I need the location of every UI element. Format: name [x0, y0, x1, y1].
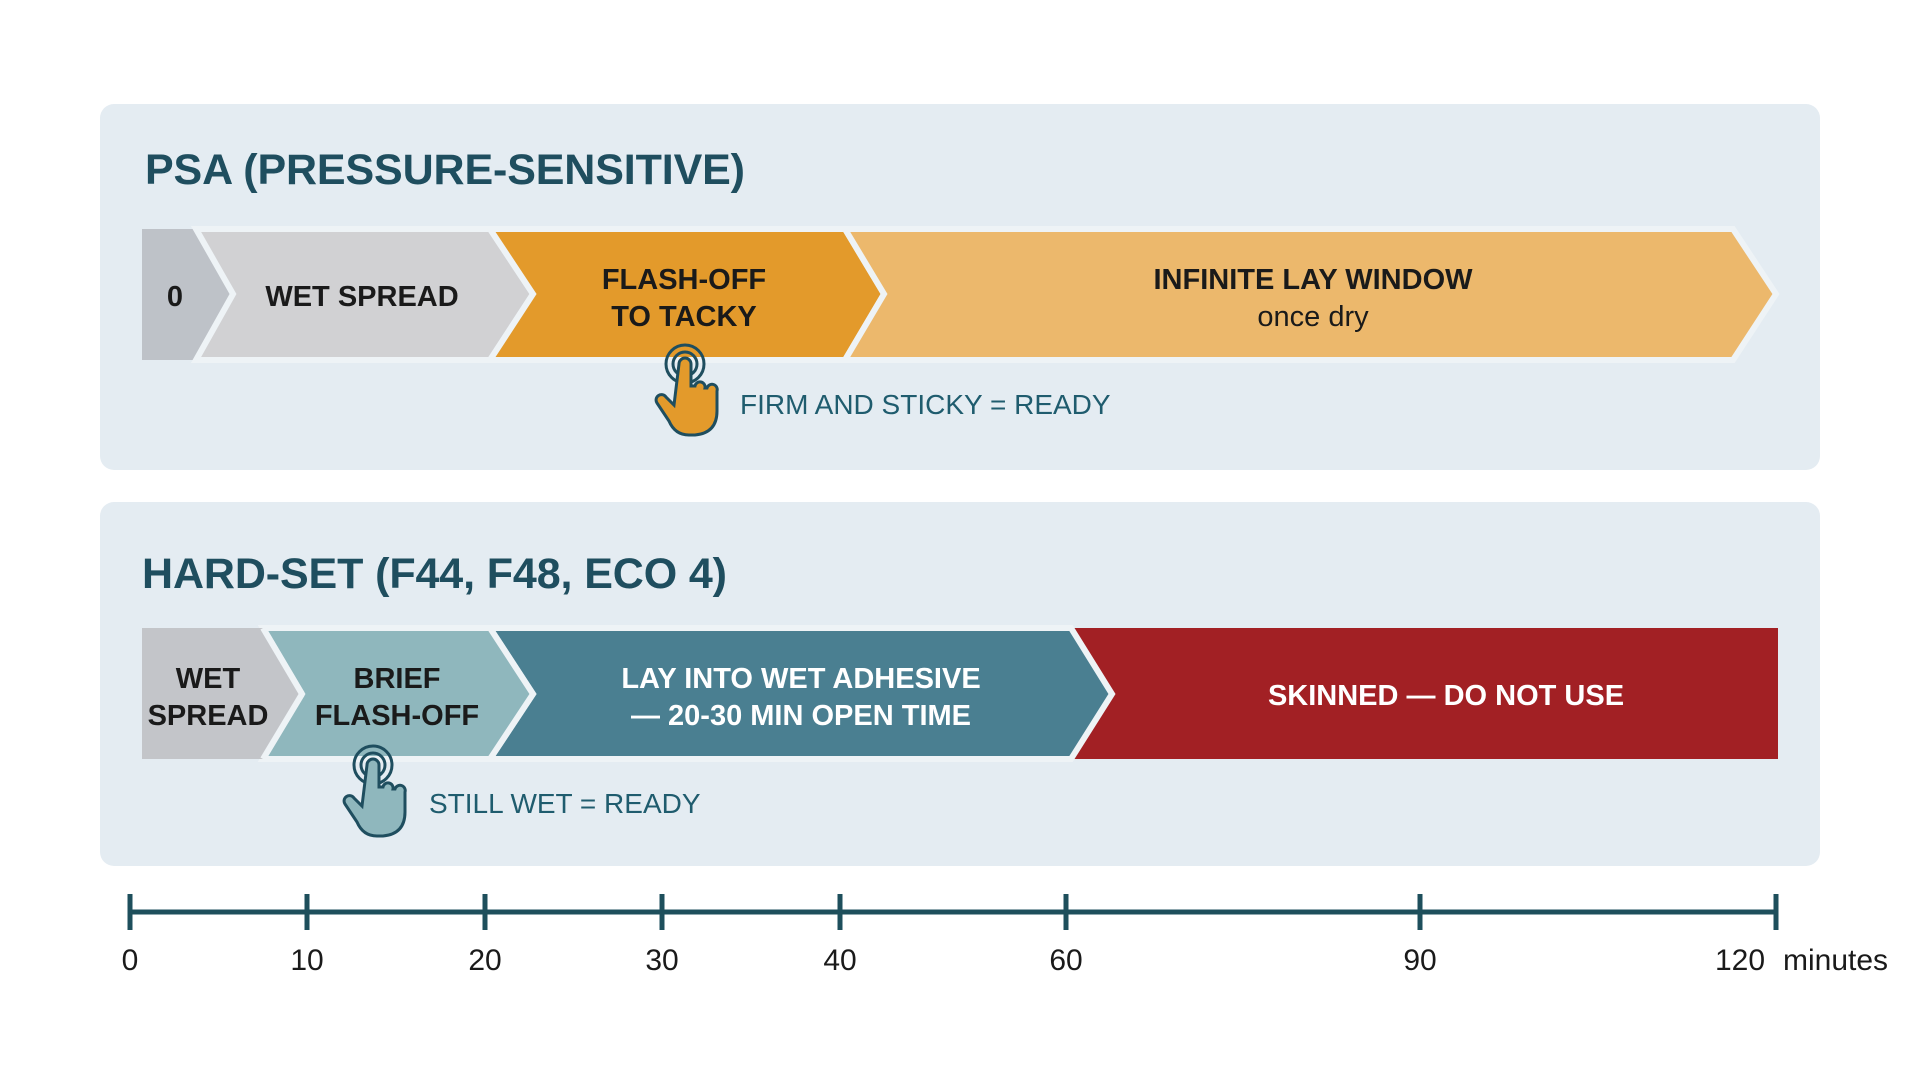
axis: minutes: 10 [290, 944, 324, 977]
axis: minutes: 20 [468, 944, 502, 977]
segment labels: PSA: once dry [1257, 301, 1369, 333]
axis: minutes: 40 [823, 944, 857, 977]
segment labels: HARD-SET: BRIEF [354, 663, 440, 695]
axis: minutes: 90 [1403, 944, 1437, 977]
segment labels: PSA: FLASH-OFF [602, 264, 766, 296]
segment labels: HARD-SET: WET [176, 663, 240, 695]
panel: HARD-SET [100, 502, 1820, 866]
heading: PSA: PSA (PRESSURE-SENSITIVE) [145, 146, 745, 194]
segment labels: HARD-SET: SKINNED — DO NOT USE [1268, 680, 1624, 712]
callout: still wet: STILL WET = READY [429, 788, 701, 819]
segment labels: HARD-SET [148, 663, 1624, 732]
segment labels: HARD-SET: LAY INTO WET ADHESIVE [621, 663, 981, 695]
axis: minutes: minutes [1783, 944, 1888, 977]
axis: minutes [122, 894, 1888, 977]
segment labels: PSA: TO TACKY [611, 301, 757, 333]
timeline bar: PSA [142, 229, 1776, 360]
segment labels: PSA: INFINITE LAY WINDOW [1154, 264, 1473, 296]
segment labels: HARD-SET: SPREAD [148, 700, 268, 732]
segment labels: HARD-SET: FLASH-OFF [315, 700, 479, 732]
axis: minutes: 30 [645, 944, 679, 977]
segment labels: PSA: WET SPREAD [265, 281, 459, 313]
segment labels: PSA [167, 264, 1473, 333]
panel: PSA [100, 104, 1820, 470]
axis: minutes: 60 [1049, 944, 1083, 977]
callout: firm and sticky: FIRM AND STICKY = READY [740, 389, 1111, 420]
axis: minutes: 0 [122, 944, 138, 977]
segment labels: HARD-SET: — 20-30 MIN OPEN TIME [631, 700, 971, 732]
icon: hand touch teal [344, 746, 405, 836]
axis: minutes: 120 [1715, 944, 1765, 977]
icon: hand touch orange [656, 345, 717, 435]
heading: HARD-SET: HARD-SET (F44, F48, ECO 4) [142, 550, 727, 598]
segment labels: PSA: 0 [167, 281, 183, 313]
timeline bar: HARD-SET [142, 628, 1778, 759]
